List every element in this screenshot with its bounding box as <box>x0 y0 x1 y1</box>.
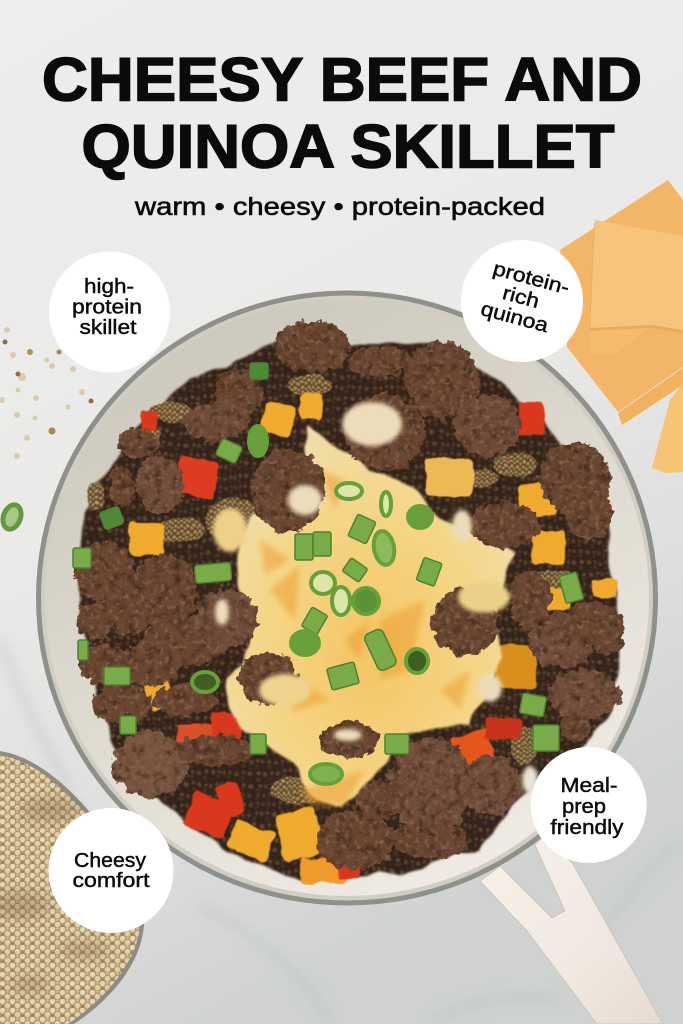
ground beef under cheese <box>75 320 623 870</box>
badge: cheesy comfort: Cheesy <box>74 850 146 872</box>
badge: high-protein skillet: high- <box>84 276 134 298</box>
badge: high-protein skillet: skillet <box>80 317 137 339</box>
skillet <box>36 290 658 906</box>
cheese slices <box>560 180 683 473</box>
cheese draped on beef <box>213 402 538 794</box>
scattered quinoa grains <box>0 327 94 459</box>
badge: meal-prep friendly: prep <box>562 796 606 818</box>
badge: meal-prep friendly <box>531 747 647 863</box>
quinoa base <box>80 325 620 880</box>
subtitle: warm • cheesy • protein-packed <box>134 193 545 221</box>
tan quinoa clusters <box>88 375 577 804</box>
quinoa bowl <box>0 751 144 1024</box>
badge: high-protein skillet <box>49 252 170 372</box>
pan rim and interior <box>36 290 658 906</box>
orange cheese streaks <box>260 470 470 805</box>
scallions <box>73 363 584 754</box>
badge: protein-rich quinoa: quinoa <box>478 298 552 337</box>
badge: cheesy comfort: comfort <box>72 870 150 892</box>
title <box>42 46 642 180</box>
peppers <box>130 393 618 883</box>
title: CHEESY BEEF AND <box>42 46 642 114</box>
icon: scallion on table <box>0 499 27 535</box>
ground beef on top of cheese <box>194 394 540 758</box>
melted cheese <box>228 425 512 806</box>
badge: protein-rich quinoa <box>461 240 583 362</box>
pan handle <box>480 835 663 1024</box>
badge: cheesy comfort <box>48 808 174 933</box>
badge: protein-rich quinoa: rich <box>500 282 542 313</box>
badge: meal-prep friendly: Meal- <box>560 775 618 797</box>
scallion rings <box>192 426 432 784</box>
badge: meal-prep friendly: friendly <box>550 817 624 839</box>
badge: protein-rich quinoa: protein- <box>491 258 572 299</box>
title: QUINOA SKILLET <box>82 112 614 180</box>
badge: high-protein skillet: protein <box>72 296 142 318</box>
